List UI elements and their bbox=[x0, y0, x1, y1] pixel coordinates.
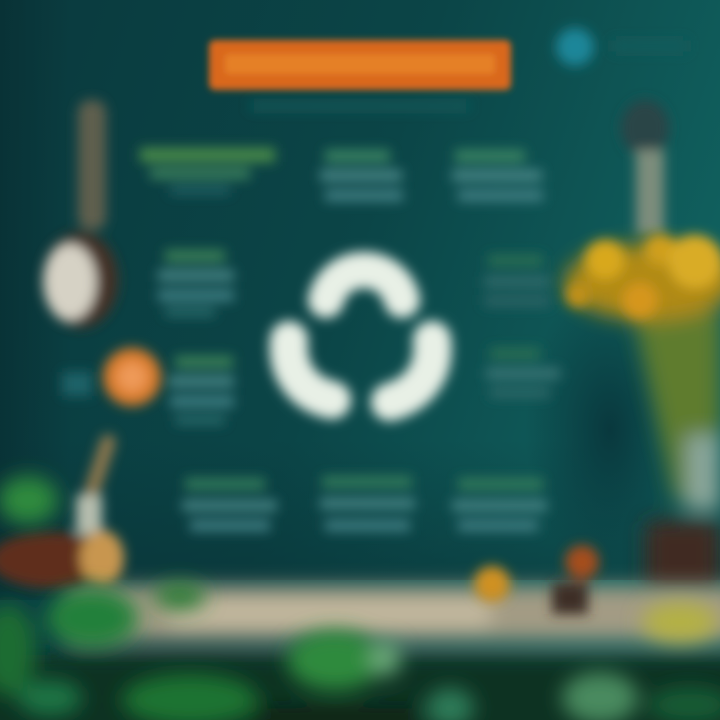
foliage: leaves in the foreground bbox=[0, 476, 720, 720]
text block: top right bbox=[452, 150, 543, 201]
header note bbox=[612, 40, 687, 52]
text block: lower left middle bbox=[168, 356, 234, 424]
text block: bottom centre bbox=[320, 476, 415, 531]
text block: top left bbox=[140, 148, 275, 194]
small label beside orange icon bbox=[62, 372, 92, 396]
text block: upper right middle bbox=[484, 255, 550, 306]
icon: orange circle bbox=[103, 348, 161, 406]
text block: upper left middle bbox=[158, 250, 234, 316]
illustration: wooden spoon bbox=[42, 100, 118, 328]
lemon and greens at right of table bbox=[642, 602, 718, 642]
subtitle bar bbox=[250, 102, 470, 110]
illustration: vase with yellow flowers bbox=[565, 100, 720, 590]
illustration: small fruit on table bbox=[474, 545, 599, 614]
text block: lower right middle bbox=[486, 348, 560, 397]
text block: bottom left bbox=[182, 478, 277, 531]
title banner bbox=[209, 40, 511, 90]
table top bbox=[0, 586, 720, 720]
text block: bottom right bbox=[452, 478, 547, 531]
text block: top centre bbox=[320, 150, 403, 201]
illustration: mortar and pestle bbox=[0, 442, 124, 588]
icon: recycling symbol bbox=[289, 270, 433, 402]
icon: blue badge bbox=[556, 28, 594, 66]
